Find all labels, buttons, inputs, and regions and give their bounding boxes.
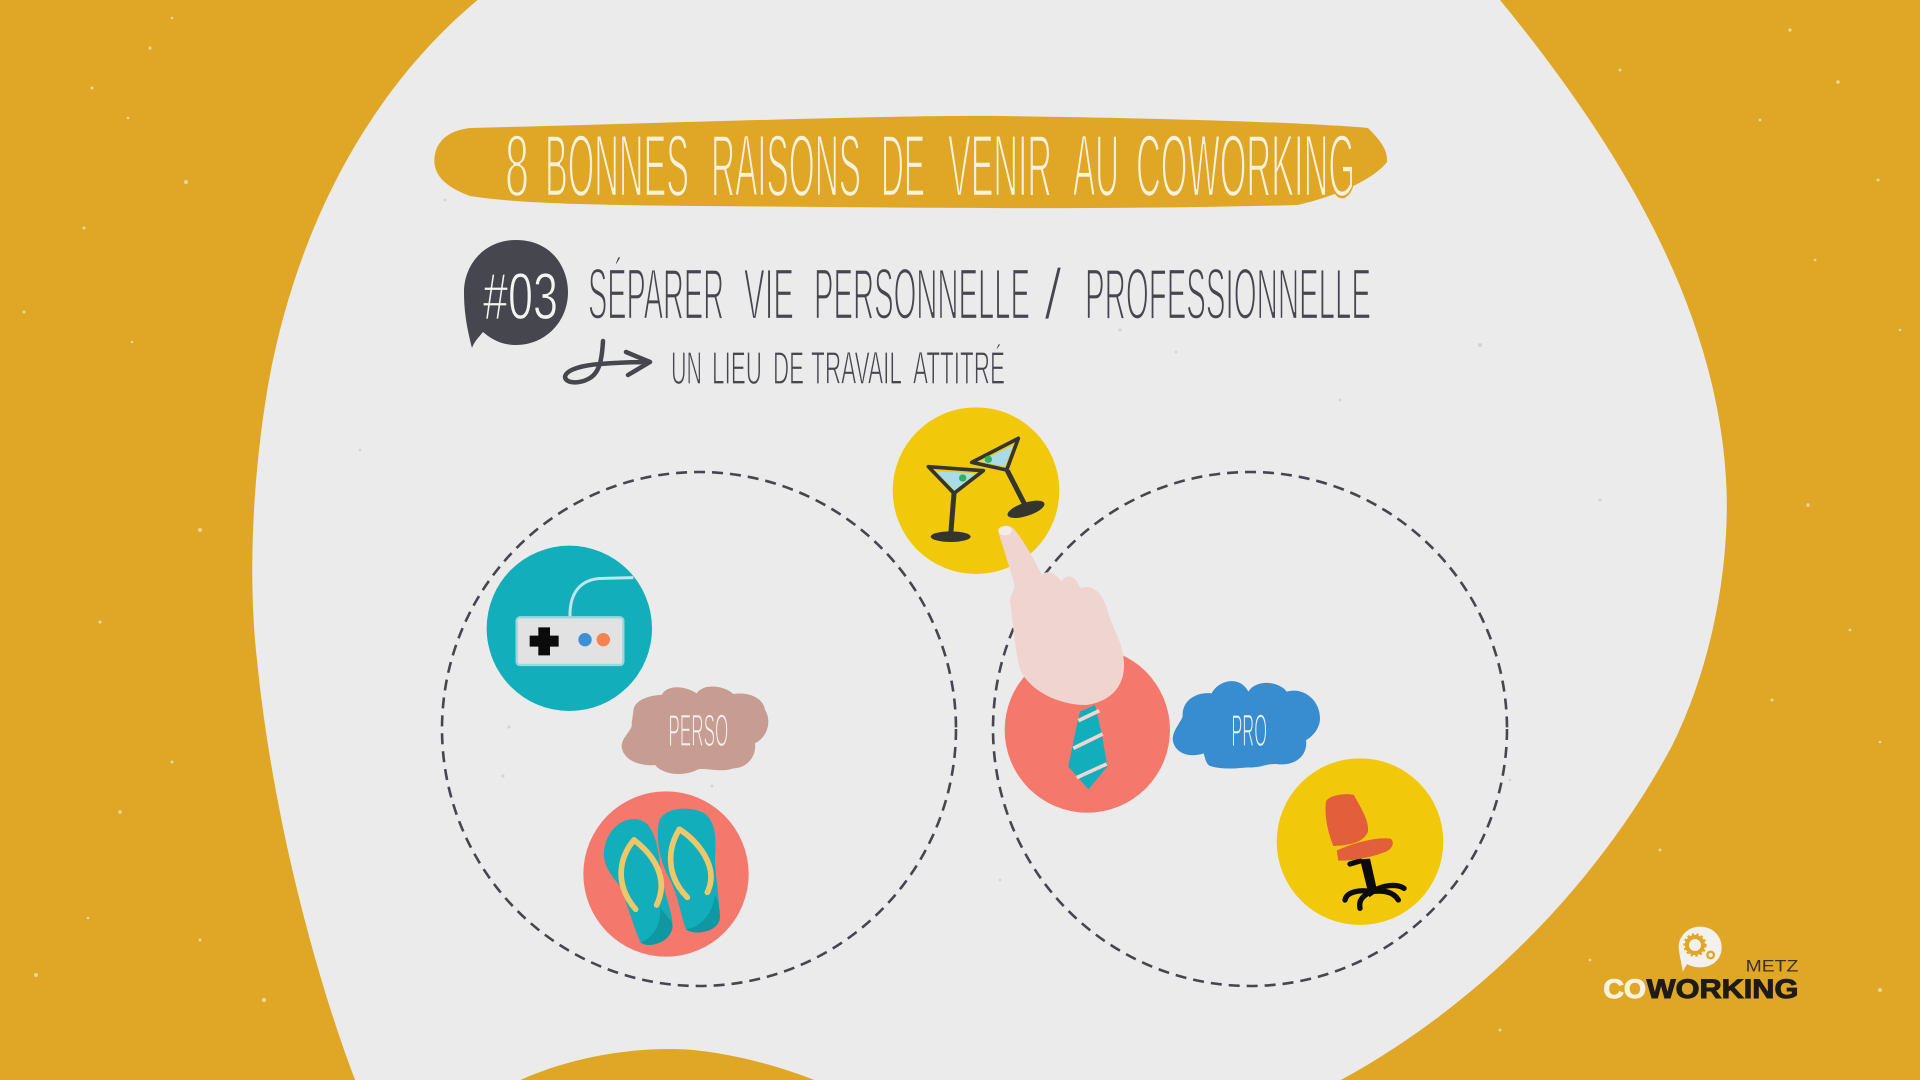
- dashed circle: pro: [993, 472, 1507, 986]
- logo: metz coworking: CO: [1603, 974, 1646, 1004]
- dashed circle: perso: [442, 472, 956, 986]
- text: PROFESSIONNELLE: [1085, 255, 1371, 335]
- title banner: BONNES: [545, 116, 689, 215]
- logo: metz coworking: WORKING: [1647, 974, 1798, 1004]
- subheading: TRAVAIL: [811, 342, 902, 394]
- title banner: RAISONS: [711, 116, 861, 215]
- logo speech bubble with gears: [1679, 927, 1722, 972]
- section heading: /: [1044, 255, 1062, 335]
- logo: metz coworking: [1603, 927, 1798, 1004]
- cloud label: pro: [1173, 681, 1320, 769]
- number speech bubble: #03: [483, 259, 558, 333]
- title banner: DE: [881, 116, 925, 215]
- section heading: PERSONNELLE: [814, 255, 1030, 335]
- subheading: [671, 342, 1005, 394]
- white blob panel: [252, 0, 1727, 1080]
- number speech bubble: [464, 240, 568, 348]
- icon: flip-flops: [583, 791, 749, 957]
- text: ATTITRÉ: [913, 342, 1005, 394]
- icon: cocktail glasses: [893, 407, 1059, 574]
- subheading: DE: [773, 342, 804, 394]
- title banner: [434, 116, 1387, 215]
- logo: metz coworking: METZ: [1746, 956, 1798, 975]
- icon: hand-drawn arrow: [565, 341, 650, 382]
- section heading: [588, 255, 1371, 335]
- cloud label: perso: PERSO: [668, 705, 728, 756]
- title banner: AU: [1073, 116, 1119, 215]
- icon: office chair: [1277, 758, 1443, 925]
- title banner: VENIR: [948, 116, 1052, 215]
- cloud label: pro: PRO: [1231, 705, 1267, 756]
- title banner: 8: [505, 116, 529, 215]
- icon: game controller: [487, 546, 652, 711]
- section heading: SÉPARER: [588, 255, 724, 335]
- icon: necktie: [1005, 647, 1170, 813]
- text: COWORKING: [1136, 116, 1355, 215]
- subheading: LIEU: [712, 342, 762, 394]
- section heading: VIE: [744, 255, 794, 335]
- subheading: UN: [671, 342, 702, 394]
- cloud label: perso: [622, 687, 768, 774]
- icon: pointing hand: [998, 526, 1124, 705]
